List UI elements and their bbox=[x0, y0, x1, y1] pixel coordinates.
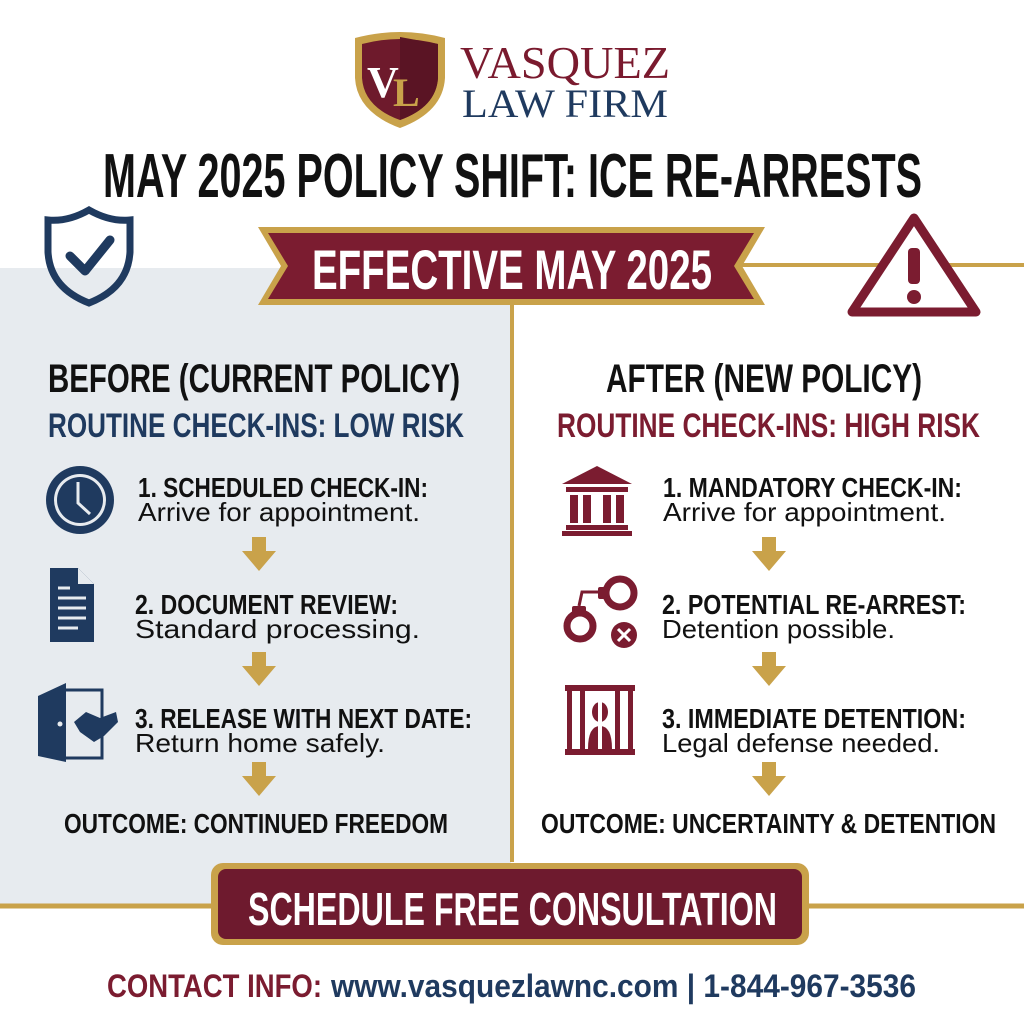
icon: clock bbox=[46, 466, 114, 534]
banner: effective may 2025 bbox=[258, 227, 765, 305]
step 2 text: 2. POTENTIAL RE-ARREST: bbox=[662, 589, 966, 620]
step 1 text: 1. MANDATORY CHECK-IN: bbox=[663, 472, 962, 503]
step 3 text bbox=[662, 703, 966, 758]
step 2 text: Standard processing. bbox=[135, 614, 420, 644]
icon: jail bbox=[565, 685, 635, 755]
logo text: VASQUEZ bbox=[460, 37, 670, 88]
contact info bbox=[107, 968, 916, 1004]
icon: handcuffs bbox=[567, 579, 637, 648]
step 1 text bbox=[663, 472, 962, 527]
arrow bbox=[242, 537, 276, 571]
arrow bbox=[752, 537, 786, 571]
contact info: www.vasquezlawnc.com | 1-844-967-3536 bbox=[330, 968, 916, 1004]
icon: courthouse bbox=[562, 466, 632, 536]
step 3 text: 3. IMMEDIATE DETENTION: bbox=[662, 703, 966, 734]
logo shield: L bbox=[393, 70, 420, 115]
subheading: low risk: ROUTINE CHECK-INS: LOW RISK bbox=[48, 407, 464, 445]
contact info: CONTACT INFO: bbox=[107, 968, 322, 1004]
left panel background bbox=[0, 268, 511, 906]
step 1 text: Arrive for appointment. bbox=[663, 497, 946, 527]
button: schedule free consultation: SCHEDULE FREE CONSULTATION bbox=[248, 883, 777, 935]
logo bbox=[355, 32, 670, 128]
icon: document bbox=[50, 568, 94, 642]
icon: shield check bbox=[48, 210, 130, 303]
step 3 text: Legal defense needed. bbox=[662, 728, 940, 758]
heading: after: AFTER (NEW POLICY) bbox=[606, 357, 922, 401]
icon: warning triangle bbox=[852, 218, 976, 312]
outcome left: OUTCOME: CONTINUED FREEDOM bbox=[64, 808, 448, 839]
panel: after bbox=[541, 357, 996, 839]
arrow bbox=[242, 762, 276, 796]
panel: before bbox=[38, 357, 472, 839]
arrow bbox=[752, 762, 786, 796]
arrow bbox=[752, 652, 786, 686]
logo text bbox=[460, 37, 670, 126]
step 2 text: 2. DOCUMENT REVIEW: bbox=[135, 589, 398, 620]
banner: effective may 2025: EFFECTIVE MAY 2025 bbox=[312, 238, 712, 301]
heading: before: BEFORE (CURRENT POLICY) bbox=[48, 357, 460, 401]
arrow bbox=[242, 652, 276, 686]
step 1 text: 1. SCHEDULED CHECK-IN: bbox=[138, 472, 428, 503]
step 3 text bbox=[135, 703, 472, 758]
button: schedule free consultation bbox=[211, 863, 809, 945]
logo shield: V bbox=[367, 58, 399, 107]
logo text: LAW FIRM bbox=[462, 81, 668, 126]
step 3 text: 3. RELEASE WITH NEXT DATE: bbox=[135, 703, 472, 734]
step 2 text bbox=[662, 589, 966, 644]
step 2 text bbox=[135, 589, 420, 644]
step 1 text bbox=[138, 472, 428, 527]
logo shield bbox=[355, 32, 445, 128]
step 1 text: Arrive for appointment. bbox=[138, 497, 420, 527]
icon: door handshake bbox=[38, 683, 118, 762]
step 3 text: Return home safely. bbox=[135, 728, 385, 758]
step 2 text: Detention possible. bbox=[662, 614, 895, 644]
